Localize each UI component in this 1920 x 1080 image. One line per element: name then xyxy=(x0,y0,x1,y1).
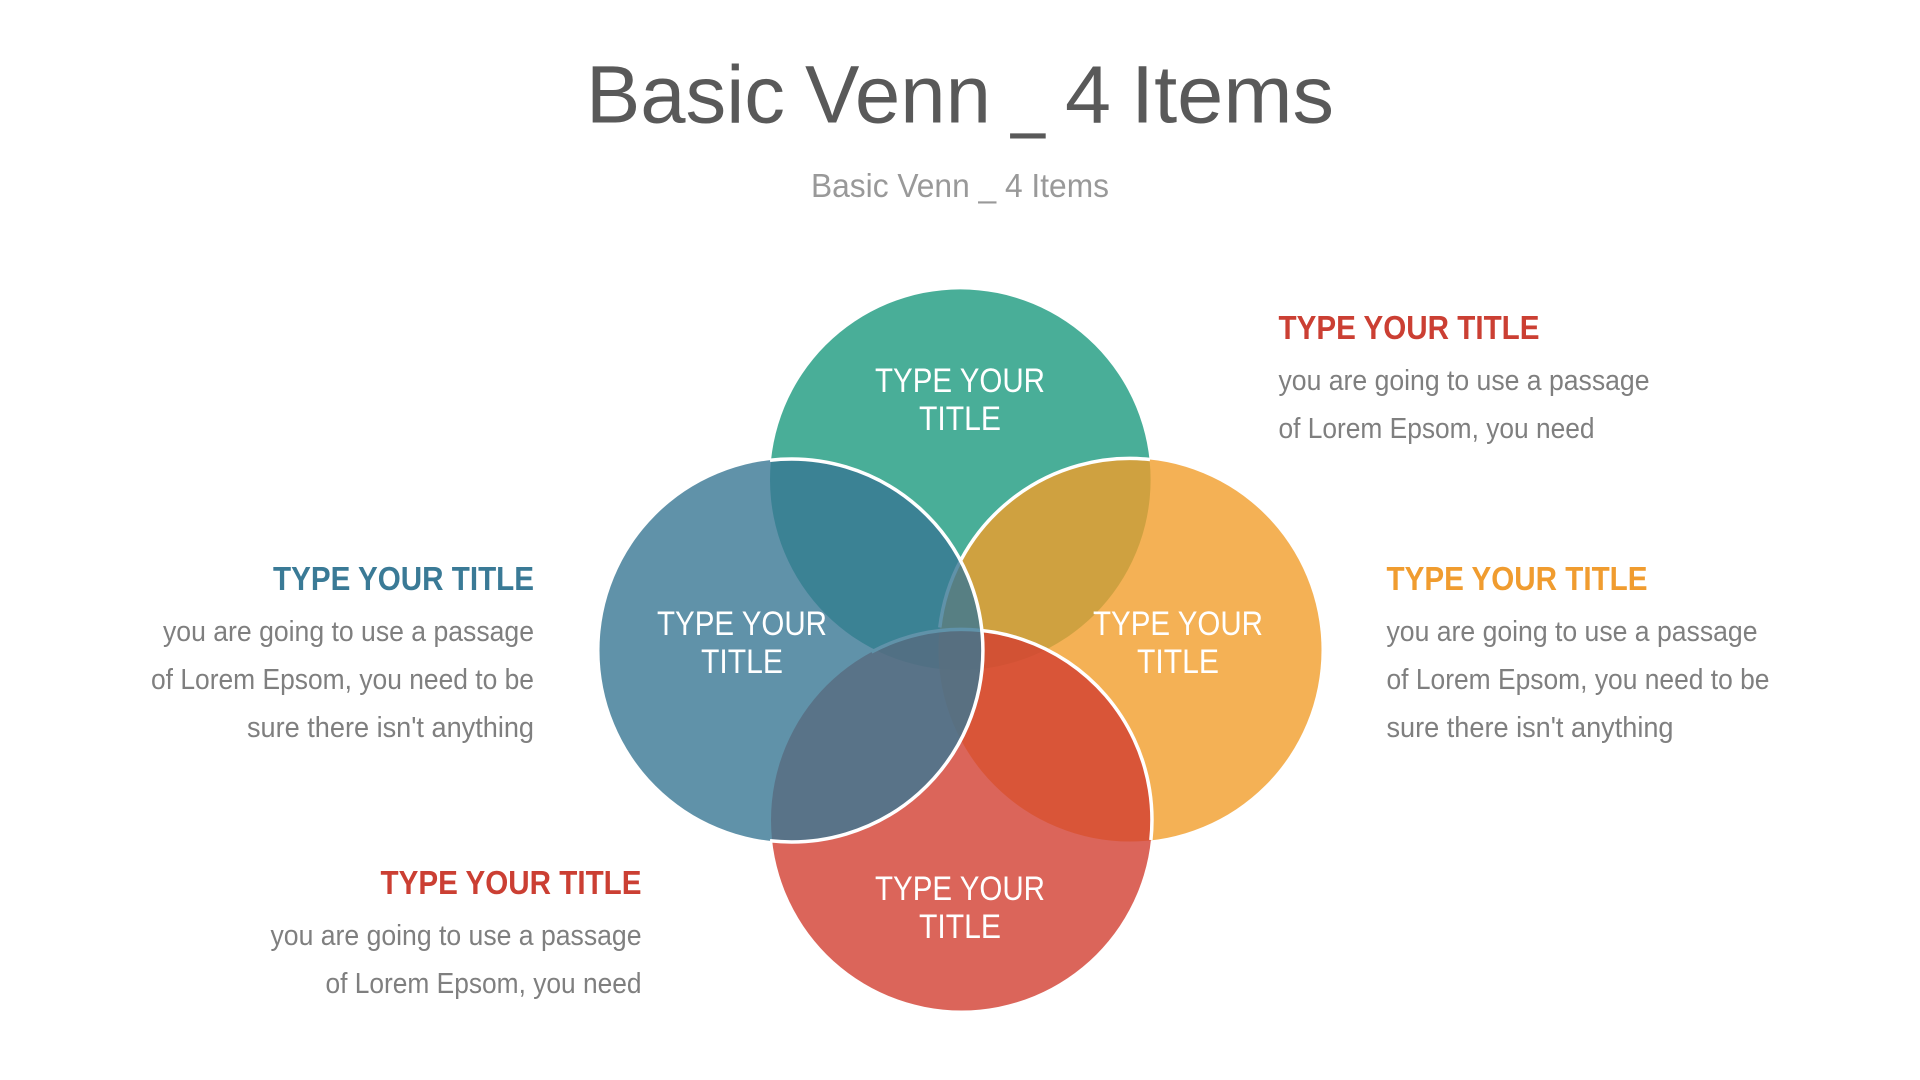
text block: right: TYPE YOUR TITLE xyxy=(1386,560,1648,597)
title: Venn xyxy=(805,50,991,140)
text block: right xyxy=(1386,560,1770,744)
title xyxy=(586,50,1334,140)
circle label: left: TITLE xyxy=(701,643,783,681)
text block: bottom left: of Lorem Epsom, you need xyxy=(326,968,642,1000)
text block: left: you are going to use a passage xyxy=(163,616,534,648)
outline: orange upper arc xyxy=(940,458,1150,628)
circle label: bottom: TYPE YOUR xyxy=(875,870,1045,908)
circle: red bottom xyxy=(771,630,1152,1010)
text block: bottom left xyxy=(270,864,642,1000)
text block: right: sure there isn't anything xyxy=(1386,712,1674,744)
subtitle: Basic Venn _ 4 Items xyxy=(811,167,1109,204)
text block: right: of Lorem Epsom, you need to be xyxy=(1386,664,1770,696)
circle label: right: TITLE xyxy=(1137,643,1219,681)
circle label: bottom: TITLE xyxy=(919,908,1001,946)
text block: top right: of Lorem Epsom, you need xyxy=(1278,413,1594,445)
circle: blue left xyxy=(600,459,982,842)
outline: red upper arc xyxy=(872,629,1152,840)
text block: right: you are going to use a passage xyxy=(1386,616,1758,648)
circle label: top: TITLE xyxy=(919,400,1001,438)
text block: left: of Lorem Epsom, you need to be xyxy=(151,664,534,696)
circle label: left: TYPE YOUR xyxy=(657,605,827,643)
circle: orange right xyxy=(938,458,1322,842)
text block: top right: you are going to use a passage xyxy=(1278,365,1650,397)
circle label: right xyxy=(1093,605,1263,681)
outline: blue right arc xyxy=(770,459,983,842)
title: _ xyxy=(1010,50,1046,140)
circle label: bottom xyxy=(875,870,1045,946)
venn diagram xyxy=(600,289,1322,1010)
text block: bottom left: TYPE YOUR TITLE xyxy=(380,864,642,901)
text block: top right: TYPE YOUR TITLE xyxy=(1278,309,1540,346)
circle label: right: TYPE YOUR xyxy=(1093,605,1263,643)
title: Items xyxy=(1131,50,1334,140)
text block: left: TYPE YOUR TITLE xyxy=(273,560,534,597)
text block: left xyxy=(151,560,534,744)
text block: bottom left: you are going to use a passage xyxy=(270,920,642,952)
title: 4 xyxy=(1065,50,1111,140)
circle label: top xyxy=(875,362,1045,438)
text block: left: sure there isn't anything xyxy=(247,712,534,744)
circle label: top: TYPE YOUR xyxy=(875,362,1045,400)
circle label: left xyxy=(657,605,827,681)
text block: top right xyxy=(1278,309,1650,445)
circle: green top xyxy=(770,289,1151,670)
title: Basic xyxy=(586,50,785,140)
